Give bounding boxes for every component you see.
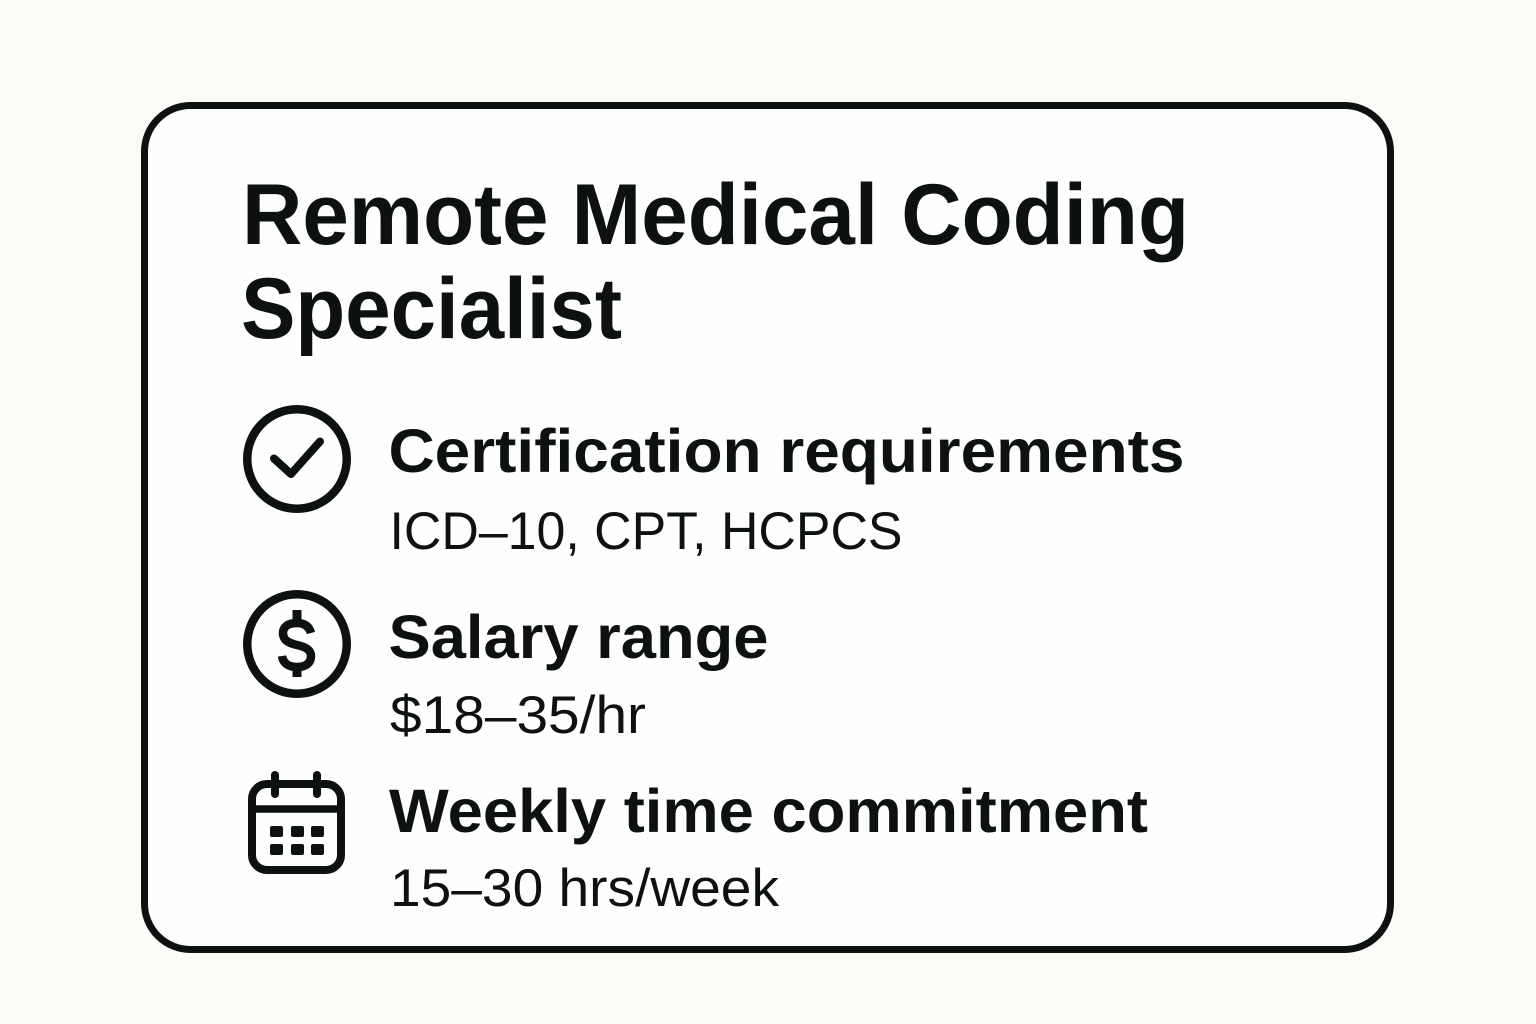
salary range text: $18–35/hr	[390, 686, 646, 745]
weekly time commitment text: 15–30 hrs/week	[390, 859, 780, 918]
title: Specialist	[241, 261, 622, 357]
weekly time commitment text: Weekly time commitment	[389, 777, 1148, 845]
icon: check mark in circle	[247, 409, 347, 509]
title: Remote Medical Coding	[242, 167, 1189, 263]
weekly time commitment text	[389, 777, 1148, 918]
icon: calendar	[252, 775, 341, 870]
salary range text	[388, 603, 768, 745]
certification requirements text: ICD–10, CPT, HCPCS	[390, 502, 902, 561]
icon: dollar sign in circle	[247, 594, 347, 694]
salary range text: Salary range	[388, 603, 768, 671]
title	[241, 167, 1189, 357]
certification requirements text: Certification requirements	[388, 417, 1184, 485]
certification requirements text	[388, 417, 1184, 561]
panel: job card	[144, 106, 1390, 950]
